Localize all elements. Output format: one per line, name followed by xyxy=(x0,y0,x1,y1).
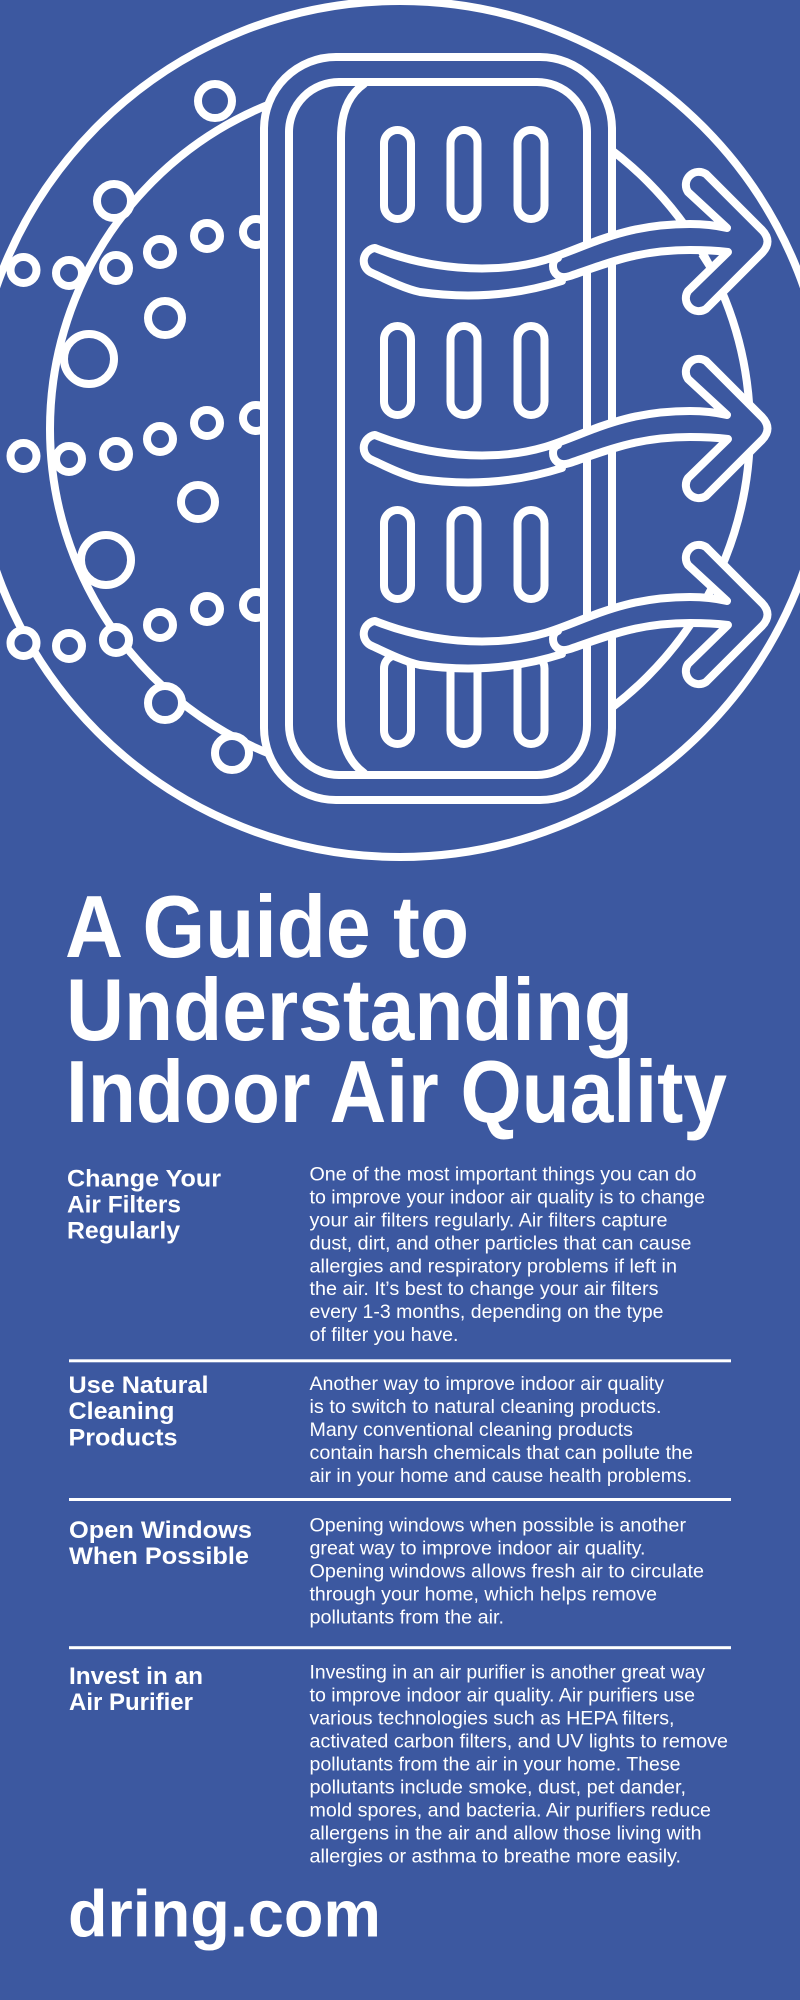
section: open windows when possible xyxy=(69,1515,704,1629)
body text: allergens in the air and allow those living with xyxy=(310,1822,702,1844)
body text: air in your home and cause health problems. xyxy=(310,1465,692,1487)
body text: allergies and respiratory problems if left in xyxy=(310,1255,677,1277)
body text: various technologies such as HEPA filters, xyxy=(310,1707,674,1729)
filter frame inner xyxy=(289,82,587,775)
body text: Many conventional cleaning products xyxy=(310,1419,633,1441)
heading: Regularly xyxy=(67,1218,180,1245)
heading: When Possible xyxy=(69,1543,249,1570)
section: invest in an air purifier xyxy=(69,1661,728,1867)
divider 3 xyxy=(69,1646,731,1649)
filter slots xyxy=(384,130,544,744)
body text: dust, dirt, and other particles that can cause xyxy=(310,1232,692,1254)
title xyxy=(65,877,727,1141)
particles: dots xyxy=(10,84,269,770)
heading: Use Natural xyxy=(68,1372,208,1399)
heading: Cleaning xyxy=(68,1398,174,1425)
outer circle xyxy=(0,1,800,857)
body text: of filter you have. xyxy=(310,1324,458,1346)
body text xyxy=(310,1164,705,1346)
heading xyxy=(68,1372,208,1452)
arrow: airflow bottom xyxy=(364,545,768,684)
filter frame outer xyxy=(264,57,612,800)
body text: pollutants from the air. xyxy=(310,1607,504,1629)
section: change your air filters xyxy=(67,1164,705,1346)
divider 1 xyxy=(69,1359,731,1362)
arrow: airflow middle xyxy=(364,359,768,498)
body text xyxy=(310,1515,704,1629)
body text xyxy=(310,1373,693,1487)
body text: your air filters regularly. Air filters capture xyxy=(310,1210,668,1232)
body text: Another way to improve indoor air quality xyxy=(310,1373,664,1395)
heading: Change Your xyxy=(67,1166,221,1193)
body text: the air. It’s best to change your air filters xyxy=(310,1278,659,1300)
body text: great way to improve indoor air quality. xyxy=(310,1538,646,1560)
heading: Open Windows xyxy=(69,1517,252,1544)
body text: One of the most important things you can do xyxy=(310,1164,697,1186)
body text: Investing in an air purifier is another great way xyxy=(310,1661,705,1683)
title: A Guide to xyxy=(65,877,469,976)
body text: to improve your indoor air quality is to change xyxy=(310,1187,705,1209)
body text: pollutants include smoke, dust, pet dander, xyxy=(310,1776,686,1798)
body text: mold spores, and bacteria. Air purifiers reduce xyxy=(310,1799,711,1821)
inner circle xyxy=(50,79,750,779)
heading xyxy=(69,1517,252,1570)
heading: Invest in an xyxy=(69,1663,203,1690)
heading xyxy=(67,1166,221,1245)
body text: Opening windows allows fresh air to circulate xyxy=(310,1561,704,1583)
arrow: airflow top xyxy=(364,172,768,311)
heading: Products xyxy=(68,1424,178,1452)
body text: pollutants from the air in your home. These xyxy=(310,1753,680,1775)
body text: is to switch to natural cleaning products. xyxy=(310,1396,662,1418)
heading: Air Filters xyxy=(67,1192,181,1219)
body text: to improve indoor air quality. Air purifiers use xyxy=(310,1684,695,1706)
body text: every 1-3 months, depending on the type xyxy=(310,1301,664,1323)
body text: allergies or asthma to breathe more easily. xyxy=(310,1845,681,1867)
title: Indoor Air Quality xyxy=(66,1042,727,1141)
title: Understanding xyxy=(66,960,633,1059)
heading: Air Purifier xyxy=(69,1689,193,1716)
body text: through your home, which helps remove xyxy=(310,1584,657,1606)
divider 2 xyxy=(69,1498,731,1501)
section: use natural cleaning products xyxy=(68,1372,693,1487)
brand footer: dring.com xyxy=(68,1877,381,1951)
illustration: air filter with particles and arrows xyxy=(0,1,800,857)
body text: activated carbon filters, and UV lights to remove xyxy=(310,1730,728,1752)
body text: contain harsh chemicals that can pollute the xyxy=(310,1442,693,1464)
heading xyxy=(69,1663,203,1716)
body text xyxy=(310,1661,728,1867)
arrow head detail: circle crossing xyxy=(702,254,711,268)
body text: Opening windows when possible is another xyxy=(310,1515,687,1537)
filter side fold xyxy=(341,84,364,773)
